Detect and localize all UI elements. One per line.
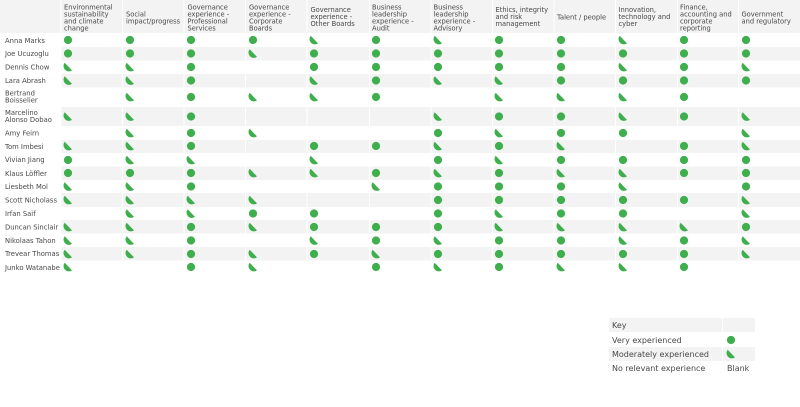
column headings: Talent / people [556,13,606,21]
row: Bertrand Boisselier [126,93,688,101]
legend: key: Very experienced [612,336,682,345]
row: Nikolaas Tahon [64,236,750,245]
column headings: Environmental [64,3,113,11]
column headings: Business [434,3,463,11]
column headings: Government [742,10,783,18]
column headings: leadership [372,10,407,18]
column headings: Finance, [680,3,708,11]
column headings: Ethics, integrity [496,6,548,14]
column headings: sustainability [64,10,109,18]
row: Tom Imbesi [64,142,750,150]
column headings: reporting [680,24,711,32]
column headings: Boards [249,24,273,32]
row: Vivian Jiang [64,156,750,164]
row: Irfan Saif [126,209,750,218]
row: Trevear Thomas [64,250,750,258]
column headings: impact/progress [126,17,181,25]
column headings: experience - [372,17,414,25]
row shading [0,0,800,274]
table: board skills matrix [0,0,800,274]
column headings: experience - [310,13,353,21]
column headings: change [64,24,89,32]
row: Dennis Chow [64,63,750,71]
icon: moderately experienced [727,350,735,358]
director names: Scott Nicholass [5,196,57,204]
column headings: experience - [188,10,230,18]
legend: key: No relevant experience [612,364,705,373]
row: Joe Ucuzoglu [64,49,750,58]
director names: Joe Ucuzoglu [4,50,49,58]
experience icons [64,36,750,271]
legend: key: Key [612,321,627,330]
column headings: Advisory [434,24,462,32]
director names: Marcelino [5,109,38,117]
column headings: corporate [680,17,712,25]
row: Anna Marks [64,36,750,44]
director names: Dennis Chow [5,64,50,72]
column headings [64,3,791,32]
legend: key: Blank [727,364,750,373]
column headings: Audit [372,24,390,32]
director names: Anna Marks [5,37,45,45]
director names: Liesbeth Mol [5,183,48,191]
column headings: Governance [310,6,351,14]
column headings: Governance [188,3,228,11]
column headings: Professional [188,17,228,25]
row: Duncan Sinclair [64,223,750,231]
director names: Amy Feirn [5,130,39,138]
column headings: technology and [618,13,670,21]
legend: key: Moderately experienced [612,350,709,359]
column headings: Corporate [249,17,282,25]
column headings: accounting and [680,10,732,18]
director names: Junko Watanabe [4,264,60,272]
director names: Irfan Saif [5,210,36,218]
row: Klaus Löffler [64,169,750,177]
director names: Nikolaas Tahon [5,237,56,245]
column headings: management [496,20,541,28]
column headings: and climate [64,17,103,25]
director names [4,37,60,272]
director names: Vivian Jiang [5,156,45,164]
column headings: leadership [434,10,469,18]
director names: Lara Abrash [5,77,46,85]
icon: very experienced [727,336,735,344]
director names: Boisselier [5,96,38,104]
row: Amy Feirn [126,129,750,137]
row: Junko Watanabe [64,263,688,271]
director names: Klaus Löffler [5,170,47,178]
column headings: Governance [249,3,289,11]
director names: Duncan Sinclair [5,224,58,232]
legend: key [609,318,755,373]
column headings: and risk [496,13,522,21]
column headings: and regulatory [742,17,791,25]
director names: Alonso Dobao [5,116,52,124]
director names: Tom Imbesi [4,143,44,151]
column headings: Social [126,10,146,18]
row: Liesbeth Mol [64,182,750,191]
director names: Trevear Thomas [4,250,60,258]
row: Scott Nicholass [64,196,750,204]
column headings: Other Boards [310,20,355,28]
column headings: Innovation, [618,6,656,14]
row: Lara Abrash [64,76,750,85]
row: Marcelino Alonso Dobao [64,112,750,121]
column headings: Services [188,24,216,32]
director names: Bertrand [5,90,35,98]
column headings: experience - [434,17,476,25]
column headings: cyber [618,20,637,28]
column headings: experience - [249,10,291,18]
column headings: Business [372,3,402,11]
